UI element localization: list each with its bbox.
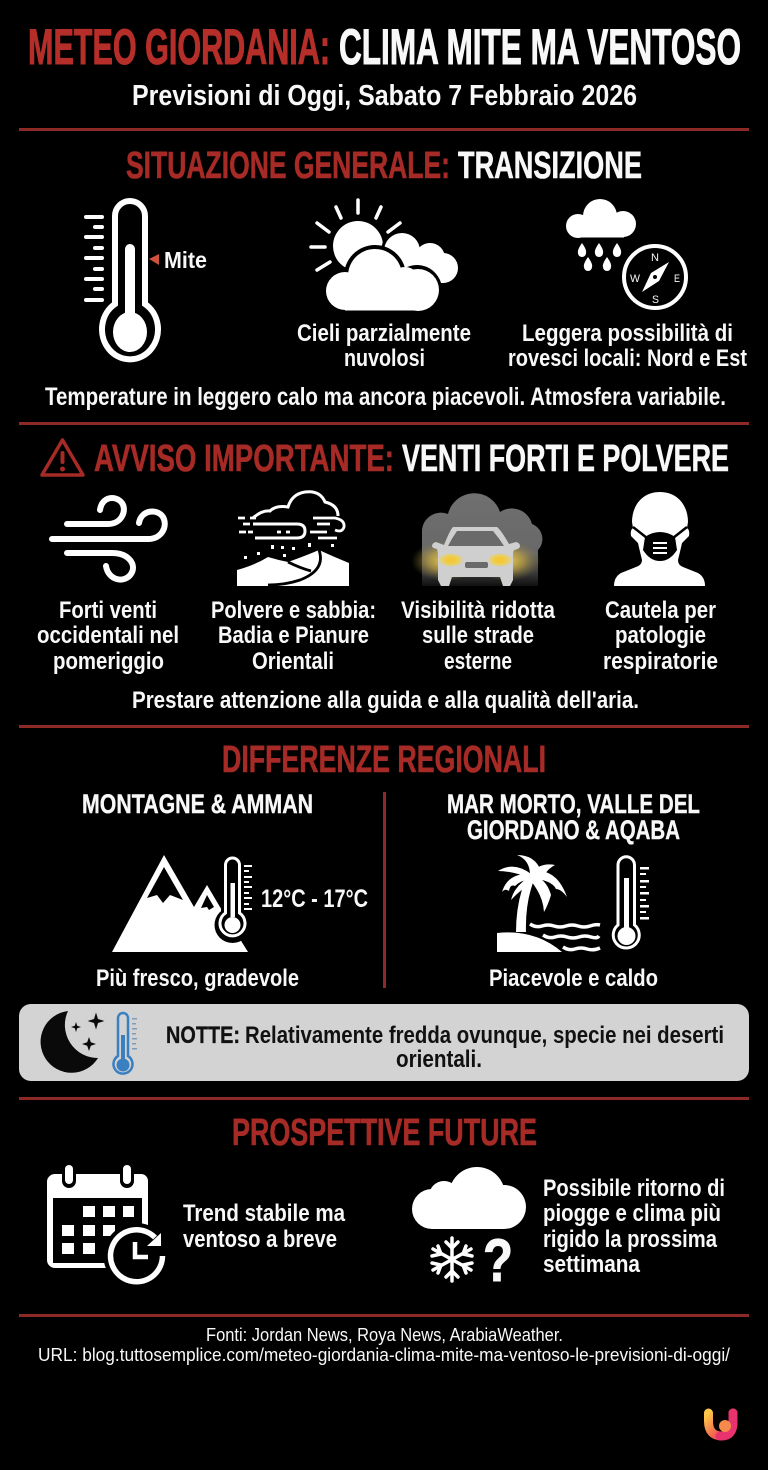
heading: avviso importante (94, 438, 729, 480)
icon: cloud snow question (412, 1167, 526, 1294)
panel: notte (19, 1004, 749, 1081)
icon: sun and clouds (311, 200, 461, 315)
text: forti venti: occidentali nel (37, 622, 179, 649)
text: prestare attenzione: Prestare attenzione alla guida e alla qualità dell'aria. (132, 687, 639, 714)
heading: montagne e amman: MONTAGNE & AMMAN (82, 789, 313, 819)
text: polvere e sabbia (211, 597, 376, 675)
text: forti venti: Forti venti (59, 597, 157, 624)
icon: wind (52, 498, 165, 580)
heading: situazione generale: TRANSIZIONE (458, 145, 642, 187)
icon: cloud snow question: ? (483, 1227, 513, 1294)
text: cieli parzialmente nuvolosi (297, 320, 471, 372)
text: polvere e sabbia: Badia e Pianure (218, 622, 369, 649)
text: cautela: patologie (615, 622, 706, 649)
heading: prospettive future: PROSPETTIVE FUTURE (232, 1112, 537, 1154)
icon: rain and compass (566, 199, 686, 308)
icon: car in fog (411, 493, 542, 586)
text: possibile ritorno: rigido la prossima (543, 1226, 717, 1253)
icon: rain and compass: N (651, 252, 659, 264)
text: possibile ritorno (543, 1175, 725, 1278)
title: METEO GIORDANIA: (28, 19, 330, 75)
footer: sources: Fonti: Jordan News, Roya News, ArabiaWeather. (206, 1325, 563, 1345)
text: possibile ritorno: settimana (543, 1251, 640, 1278)
text: forti venti: pomeriggio (53, 648, 164, 675)
heading: differenze regionali: DIFFERENZE REGIONALI (222, 739, 546, 781)
icon: palm and thermometer (497, 855, 649, 952)
icon: rain and compass: E (674, 273, 680, 285)
title (28, 19, 741, 75)
text: trend stabile (183, 1200, 345, 1253)
text: possibile ritorno: Possibile ritorno di (543, 1175, 725, 1202)
icon: rain and compass: S (652, 294, 659, 306)
subtitle: Previsioni di Oggi, Sabato 7 Febbraio 2026 (132, 80, 637, 112)
text: notte (166, 1022, 724, 1073)
icon: mountains and thermometer (112, 855, 252, 952)
text: rovesci locali (508, 320, 747, 372)
icon: thermometer mite: Mite (164, 247, 207, 273)
text: polvere e sabbia: Polvere e sabbia: (211, 597, 376, 624)
text: trend stabile: Trend stabile ma (183, 1200, 345, 1227)
heading: avviso importante: AVVISO IMPORTANTE: (94, 438, 394, 480)
text: notte: NOTTE: (166, 1022, 240, 1049)
text: rovesci locali: Leggera possibilità di (522, 320, 733, 347)
icon: person with mask (614, 492, 705, 586)
text: visibilita ridotta: esterne (444, 648, 512, 675)
icon: blue thermometer (114, 1013, 137, 1074)
text: notte: orientali. (396, 1046, 482, 1073)
icon: thermometer mite (84, 201, 207, 359)
text: visibilita ridotta: Visibilità ridotta (401, 597, 555, 624)
text: forti venti (37, 597, 179, 675)
heading: mar morto (447, 789, 700, 845)
text: trend stabile: ventoso a breve (183, 1226, 337, 1253)
heading: mar morto: GIORDANO & AQABA (467, 815, 680, 845)
text: cautela: respiratorie (603, 648, 718, 675)
icon: logo (708, 1413, 733, 1436)
text: cieli parzialmente nuvolosi: nuvolosi (344, 345, 425, 372)
heading: situazione generale: SITUAZIONE GENERALE: (126, 145, 450, 187)
text: piacevole e caldo: Piacevole e caldo (489, 965, 658, 992)
text: cautela (603, 597, 718, 675)
text: visibilita ridotta (401, 597, 555, 675)
icon: dust and sand (237, 492, 349, 586)
text: polvere e sabbia: Orientali (252, 648, 334, 675)
text: temperatura montagne: 12°C - 17°C (261, 885, 368, 913)
icon: warning triangle (42, 440, 83, 475)
icon: calendar and clock (47, 1162, 170, 1289)
icon: moon and stars (41, 1011, 104, 1073)
text: visibilita ridotta: sulle strade (422, 622, 534, 649)
text: piu fresco: Più fresco, gradevole (96, 965, 299, 992)
icon: rain and compass: W (630, 273, 641, 285)
footer: sources (38, 1325, 730, 1365)
text: possibile ritorno: piogge e clima più (543, 1200, 721, 1227)
footer: sources: URL: blog.tuttosemplice.com/meteo-giordania-clima-mite-ma-ventoso-le-previsioni-di-oggi/ (38, 1345, 730, 1365)
text: cautela: Cautela per (605, 597, 716, 624)
text: cieli parzialmente nuvolosi: Cieli parzialmente (297, 320, 471, 347)
